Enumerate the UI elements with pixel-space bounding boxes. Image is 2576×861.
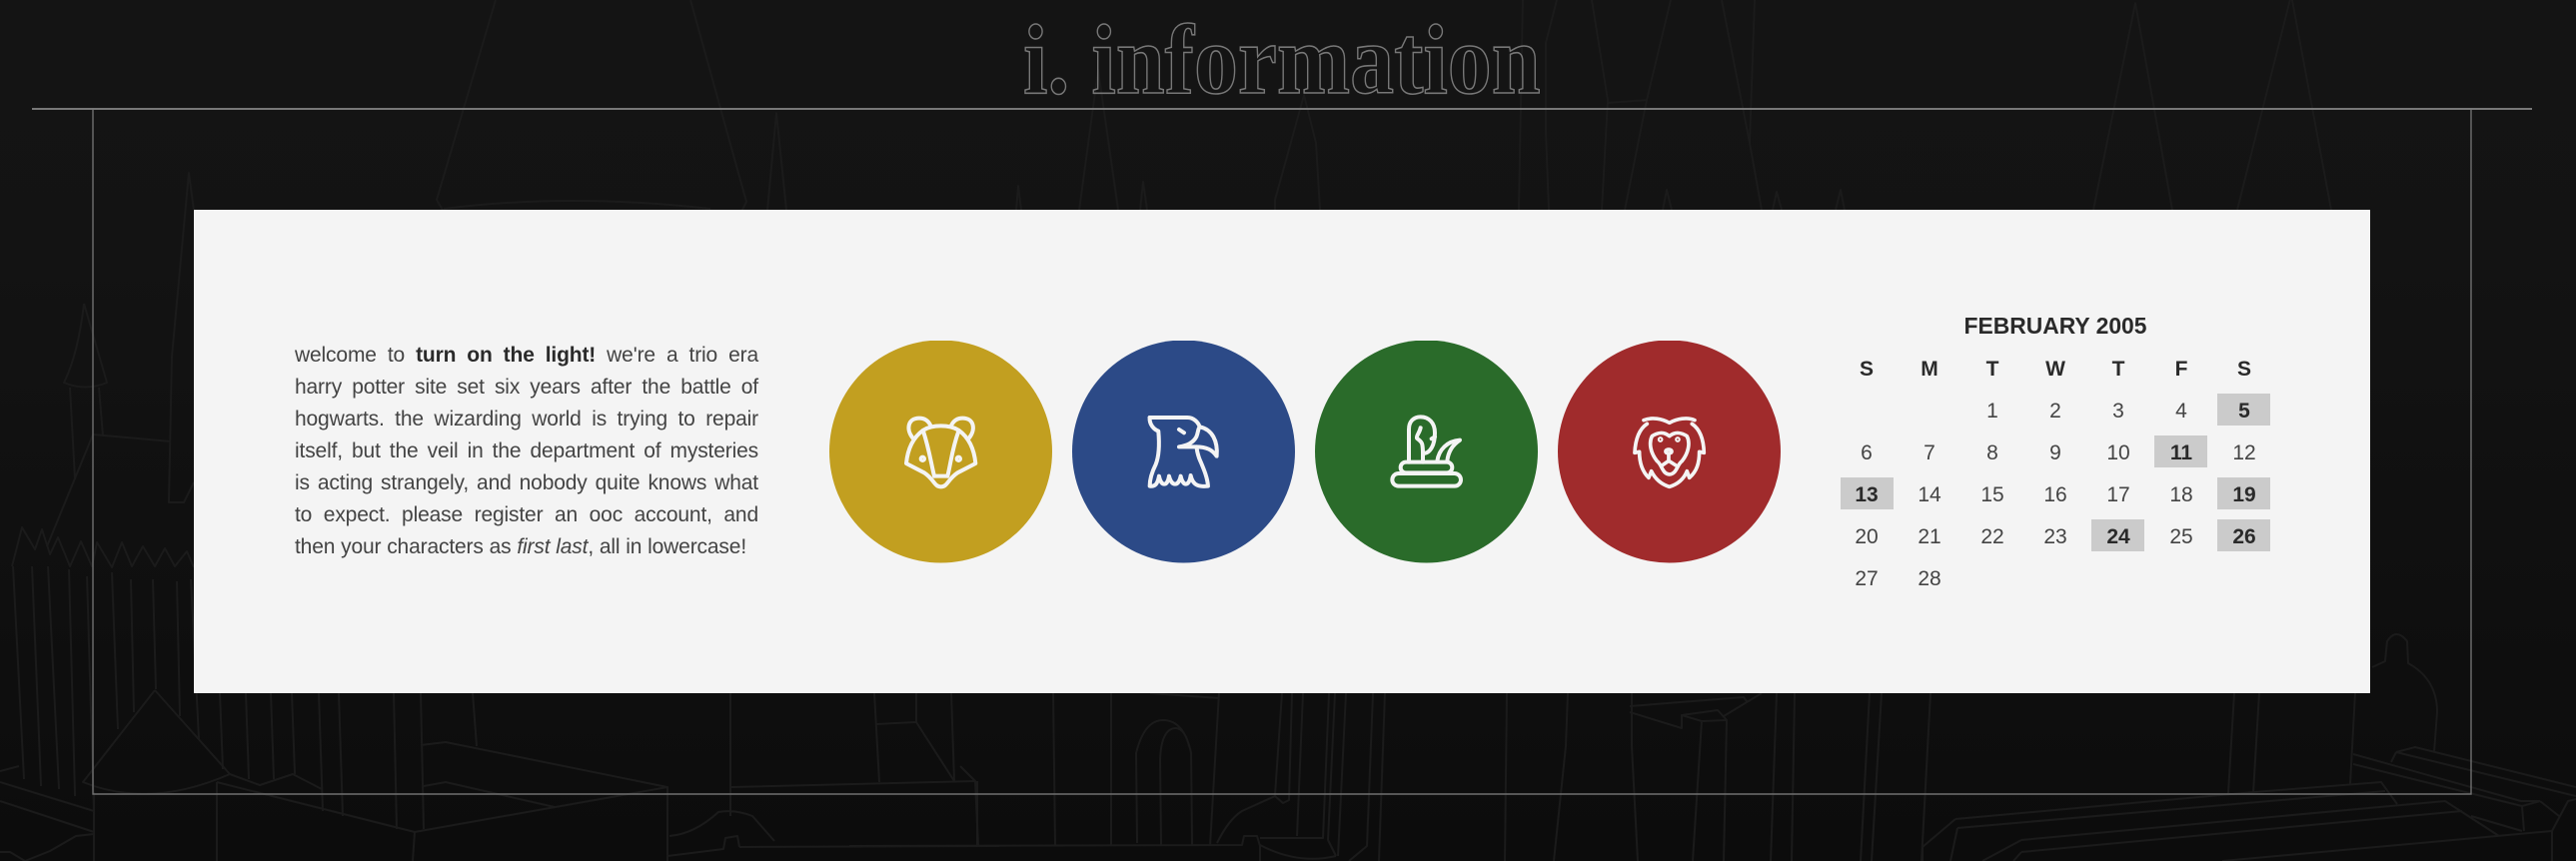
text block: welcome: hogwarts. the wizarding world is trying to repair — [295, 408, 758, 430]
calendar dates: 6 — [1861, 441, 1873, 464]
calendar dates: 15 — [1980, 483, 2004, 506]
calendar dates: 22 — [1980, 525, 2004, 548]
calendar dates — [1855, 400, 2256, 590]
calendar dates: 10 — [2106, 441, 2130, 464]
calendar dates: 9 — [2049, 441, 2061, 464]
calendar dates: 18 — [2169, 483, 2193, 506]
text block: welcome: then your characters as first last, all in lowercase! — [295, 535, 746, 558]
text block: welcome: itself, but the veil in the department of mysteries — [295, 439, 758, 462]
calendar dates: 24 — [2106, 525, 2130, 548]
calendar dates: 2 — [2049, 400, 2061, 423]
title rule — [32, 108, 2532, 110]
calendar dates: 25 — [2169, 525, 2193, 548]
text block: welcome: harry potter site set six years after the battle of — [295, 376, 758, 399]
calendar highlights — [1841, 394, 2270, 551]
calendar weekday headers — [1860, 358, 2251, 381]
calendar dates: 14 — [1918, 483, 1941, 506]
calendar weekday headers: M — [1921, 358, 1938, 381]
calendar dates: 16 — [2043, 483, 2067, 506]
calendar dates: 17 — [2106, 483, 2130, 506]
calendar weekday headers: W — [2045, 358, 2065, 381]
calendar dates: 12 — [2232, 441, 2256, 464]
calendar dates: 5 — [2238, 400, 2250, 423]
calendar dates: 23 — [2043, 525, 2067, 548]
title: i. information — [1023, 5, 1541, 115]
calendar dates: 19 — [2232, 483, 2256, 506]
icon: lion circle — [1558, 341, 1781, 563]
calendar dates: 11 — [2170, 441, 2192, 464]
calendar dates: 28 — [1918, 567, 1941, 590]
calendar weekday headers: T — [2112, 358, 2125, 381]
calendar dates: 20 — [1855, 525, 1879, 548]
calendar dates: 4 — [2175, 400, 2187, 423]
calendar title: FEBRUARY 2005 — [1964, 313, 2147, 339]
text block: welcome: is acting strangely, and nobody quite knows what — [295, 471, 758, 494]
text block: welcome: welcome to turn on the light! we're a trio era — [295, 344, 758, 367]
calendar dates: 8 — [1986, 441, 1998, 464]
calendar weekday headers: S — [1860, 358, 1874, 381]
calendar dates: 21 — [1918, 525, 1941, 548]
text block: welcome — [295, 344, 759, 558]
calendar dates: 1 — [1986, 400, 1998, 423]
calendar weekday headers: F — [2175, 358, 2188, 381]
panel: information — [194, 210, 2370, 693]
calendar dates: 7 — [1924, 441, 1935, 464]
calendar weekday headers: T — [1986, 358, 1999, 381]
icon: eagle circle — [1072, 341, 1295, 563]
calendar dates: 3 — [2112, 400, 2124, 423]
calendar dates: 26 — [2232, 525, 2256, 548]
calendar weekday headers: S — [2237, 358, 2251, 381]
calendar dates: 13 — [1855, 483, 1879, 506]
icon: snake circle — [1315, 341, 1538, 563]
icon: badger circle — [829, 341, 1052, 563]
calendar dates: 27 — [1855, 567, 1879, 590]
text block: welcome: to expect. please register an ooc account, and — [295, 503, 758, 526]
